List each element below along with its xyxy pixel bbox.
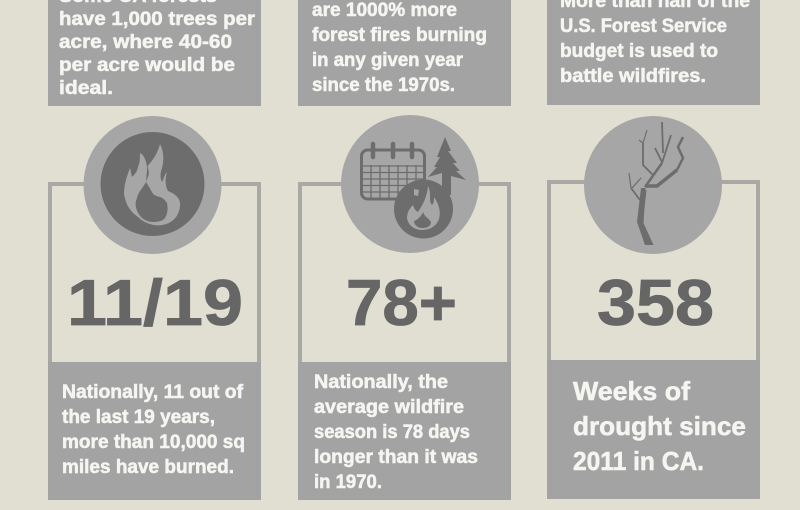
top card: trees per acre: have 1,000 trees per bbox=[59, 9, 256, 30]
bottom card: longer season: longer than it was bbox=[314, 447, 478, 468]
stat frame bbox=[549, 182, 758, 360]
bottom card: longer season: Nationally, the bbox=[314, 372, 448, 393]
top card: more fires bbox=[298, 0, 511, 106]
panel: forest density bbox=[48, 0, 261, 500]
calendar bbox=[362, 144, 424, 199]
icon: flame in circle bbox=[84, 116, 222, 254]
stat frame bbox=[300, 184, 509, 362]
bottom card: weeks of drought: 2011 in CA. bbox=[573, 446, 704, 476]
bottom card: years burned: miles have burned. bbox=[62, 457, 234, 478]
bottom card: weeks of drought: Weeks of bbox=[573, 376, 690, 406]
panel: drought bbox=[547, 0, 760, 499]
top card: trees per acre bbox=[48, 0, 261, 106]
top card: forest service budget: battle wildfires. bbox=[560, 66, 706, 87]
bottom card: years burned: more than 10,000 sq bbox=[62, 432, 245, 453]
bottom card: weeks of drought bbox=[547, 360, 760, 499]
bottom card: years burned bbox=[48, 362, 261, 500]
top card: more fires: since the 1970s. bbox=[312, 75, 455, 96]
bottom card: longer season: in 1970. bbox=[314, 472, 382, 493]
bottom card: years burned: the last 19 years, bbox=[62, 407, 215, 428]
pine tree bbox=[428, 137, 466, 195]
top card: more fires: forest fires burning bbox=[312, 25, 487, 46]
bottom card: weeks of drought: drought since bbox=[573, 411, 746, 441]
icon: dead tree bbox=[584, 116, 722, 254]
top card: trees per acre: acre, where 40-60 bbox=[59, 32, 232, 53]
top card: trees per acre: ideal. bbox=[59, 78, 113, 99]
stat number: 358 bbox=[597, 266, 714, 339]
top card: more fires: are 1000% more bbox=[312, 0, 457, 21]
top card: more fires: in any given year bbox=[312, 50, 464, 71]
top card: forest service budget: U.S. Forest Service bbox=[560, 16, 727, 37]
stat number: 78+ bbox=[346, 266, 457, 339]
top card: trees per acre: per acre would be bbox=[59, 55, 235, 76]
bottom card: longer season: average wildfire bbox=[314, 397, 464, 418]
bottom card: longer season: season is 78 days bbox=[314, 422, 470, 443]
top card: forest service budget bbox=[547, 0, 760, 105]
fire ball bbox=[394, 180, 453, 238]
stat number: 11/19 bbox=[67, 266, 243, 339]
bottom card: years burned: Nationally, 11 out of bbox=[62, 382, 244, 403]
bottom card: longer season bbox=[298, 362, 511, 500]
panel: fire season bbox=[298, 0, 511, 500]
stat frame bbox=[50, 184, 259, 362]
top card: forest service budget: budget is used to bbox=[560, 41, 718, 62]
icon: calendar, pine tree and fire bbox=[341, 115, 479, 253]
